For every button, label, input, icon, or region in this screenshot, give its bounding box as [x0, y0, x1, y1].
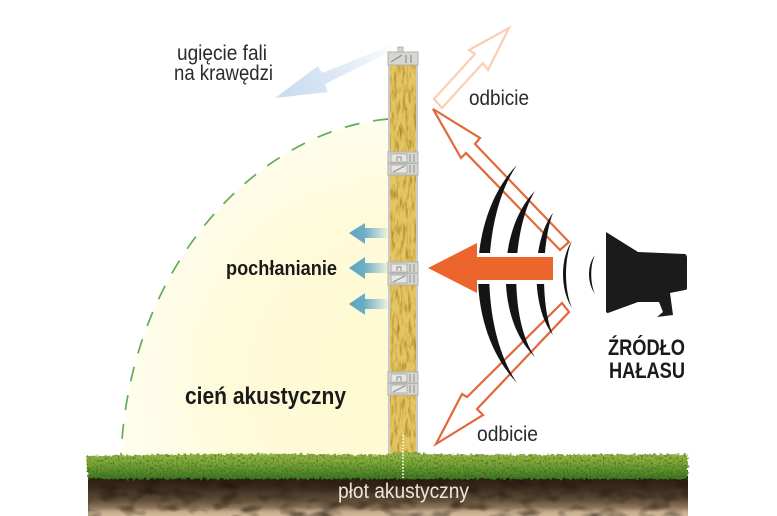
label: reflection top: odbicie — [469, 87, 529, 110]
label: noise source: ŹRÓDŁO — [608, 335, 685, 360]
arrow: edge diffraction — [275, 45, 392, 98]
sound waves — [478, 165, 595, 383]
arrow: reflection upper — [433, 109, 569, 250]
label: edge diffraction — [174, 42, 273, 85]
grass strip — [86, 452, 688, 479]
label: absorption: pochłanianie — [226, 258, 337, 280]
arrow: main noise — [428, 243, 553, 293]
acoustic shadow area — [121, 119, 388, 458]
label: edge diffraction: na krawędzi — [174, 62, 273, 85]
icon: megaphone — [606, 232, 687, 317]
absorption arrows — [349, 223, 388, 315]
dotted leader: fence label — [402, 435, 404, 478]
label: edge diffraction: ugięcie fali — [177, 42, 267, 65]
label: acoustic shadow: cień akustyczny — [185, 383, 347, 410]
label: noise source: HAŁASU — [609, 358, 685, 383]
acoustic fence panel — [388, 47, 418, 458]
label: noise source — [608, 335, 685, 383]
soil cross-section — [88, 476, 688, 516]
arrow: faded reflection up — [434, 28, 509, 108]
acoustic shadow dashed boundary — [121, 119, 388, 455]
arrow: reflection lower — [436, 303, 569, 444]
label: acoustic fence: płot akustyczny — [338, 480, 469, 503]
label: reflection bottom: odbicie — [477, 423, 538, 446]
